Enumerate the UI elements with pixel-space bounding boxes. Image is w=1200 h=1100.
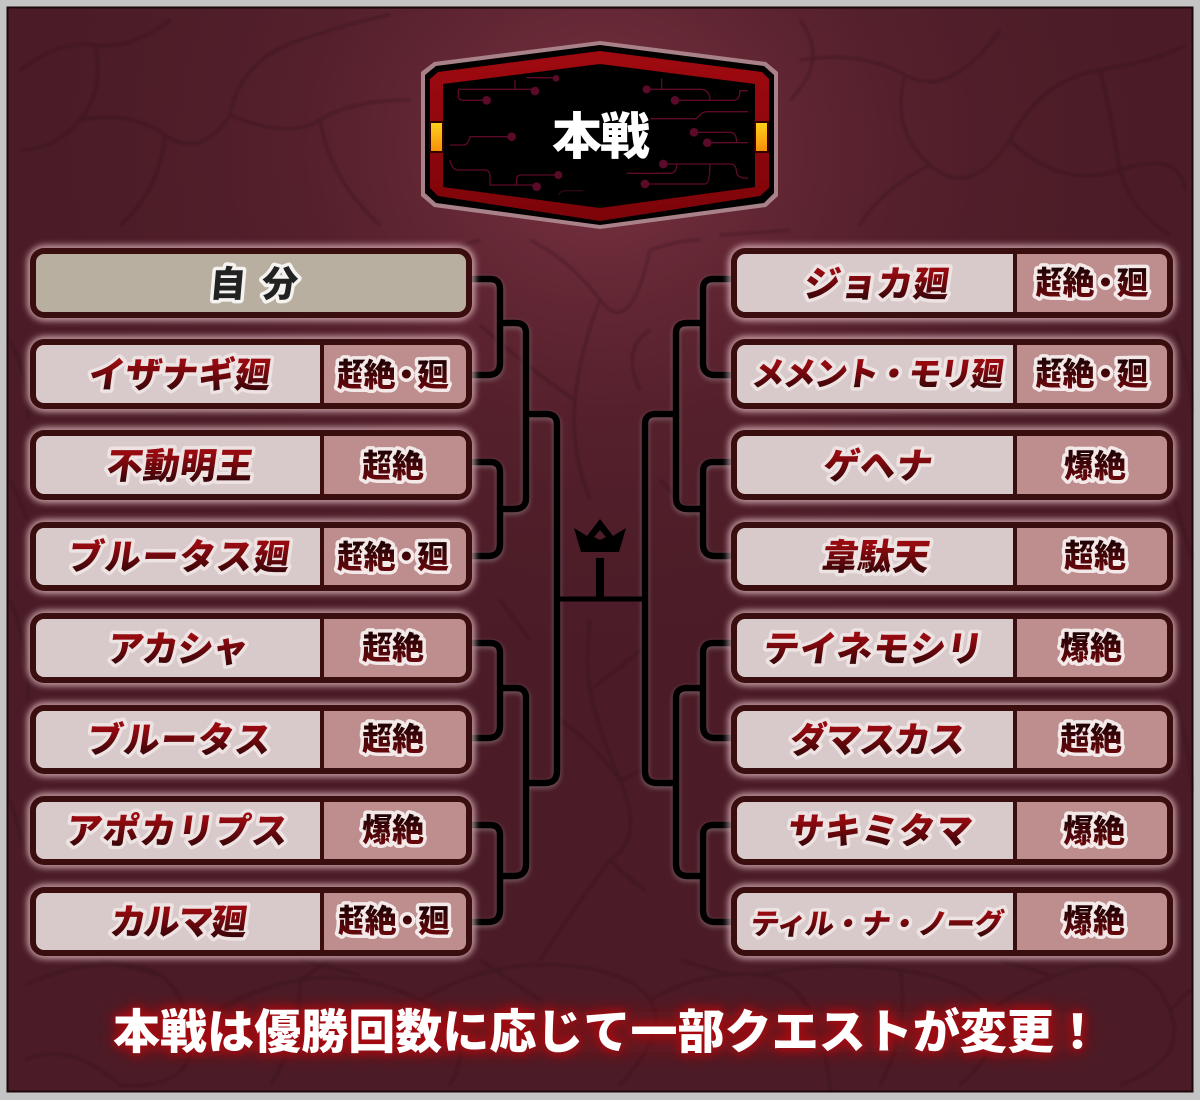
entry: Brutus kai: 超絶・廻 [337, 539, 449, 575]
entry: Tir na Nog: ティル・ナ・ノーグ [748, 907, 1006, 941]
entry: Apocalypse: 爆絶 [362, 812, 424, 848]
entry: Damascus [731, 705, 1173, 774]
entry: Brutus [30, 705, 472, 774]
entry: Teine Moshiri [731, 613, 1173, 683]
entry: Izanagi [30, 339, 472, 409]
entry: Sakimitama: サキミタマ [785, 811, 975, 851]
entry: Akasha [30, 613, 472, 683]
entry: Karma kai [30, 887, 472, 956]
bracket: left side [472, 279, 557, 924]
entry: Izanagi: イザナギ廻 [86, 355, 274, 395]
title badge [421, 41, 778, 229]
entry: Memento Mori kai: 超絶・廻 [1036, 356, 1148, 392]
entry: Gehenna [731, 430, 1173, 500]
entry: Fudo Myoo [30, 430, 472, 500]
entry: Tir na Nog: 爆絶 [1063, 903, 1125, 939]
entry: Izanagi: 超絶・廻 [337, 357, 449, 393]
bracket: right side [645, 279, 731, 924]
icon: circuit decoration [450, 75, 748, 195]
entry: Karma kai: 超絶・廻 [338, 903, 450, 939]
entry: Joka kai [731, 248, 1173, 318]
icon: crown [574, 519, 626, 552]
bracket: final connector [557, 558, 645, 601]
entry: Damascus: ダマスカス [788, 720, 968, 760]
entry: Joka kai: 超絶・廻 [1036, 265, 1148, 301]
entry: Brutus: 超絶 [362, 721, 424, 757]
entry: Memento Mori kai [731, 339, 1173, 409]
footer note: 本戦は優勝回数に応じて一部クエストが変更！ [113, 1006, 1101, 1058]
entry: Gehenna: 爆絶 [1064, 448, 1126, 484]
entry: Brutus: ブルータス [84, 720, 274, 760]
entry: Brutus kai [30, 522, 472, 591]
entry: self [30, 248, 472, 318]
entry: Fudo Myoo: 超絶 [362, 448, 424, 484]
entry: Fudo Myoo: 不動明王 [104, 446, 256, 486]
entry: Akasha: アカシャ [105, 629, 251, 669]
entry: Idaten [731, 522, 1173, 591]
entry: Akasha: 超絶 [362, 630, 424, 666]
entry: self: 自分 [208, 264, 300, 304]
icon: right gold clasp [755, 122, 768, 152]
heading: main round: 本戦 [552, 109, 650, 165]
entry: Apocalypse: アポカリプス [63, 811, 291, 851]
entry: Gehenna: ゲヘナ [821, 446, 935, 486]
entry: Damascus: 超絶 [1060, 721, 1122, 757]
entry: Joka kai: ジョカ廻 [802, 264, 952, 304]
entry: Sakimitama [731, 796, 1173, 865]
entry: Apocalypse [30, 796, 472, 865]
entry: Idaten: 超絶 [1064, 538, 1126, 574]
icon: left gold clasp [430, 122, 443, 152]
entry: Teine Moshiri: 爆絶 [1060, 630, 1122, 666]
entry: Brutus kai: ブルータス廻 [65, 537, 293, 577]
entry: Sakimitama: 爆絶 [1063, 813, 1125, 849]
entry: Teine Moshiri: テイネモシリ [761, 629, 985, 669]
entry: Memento Mori kai: メメント・モリ廻 [749, 357, 1007, 393]
entry: Tir na Nog [731, 887, 1173, 956]
entry: Idaten: 韋駄天 [820, 537, 932, 577]
entry: Karma kai: カルマ廻 [108, 902, 250, 942]
